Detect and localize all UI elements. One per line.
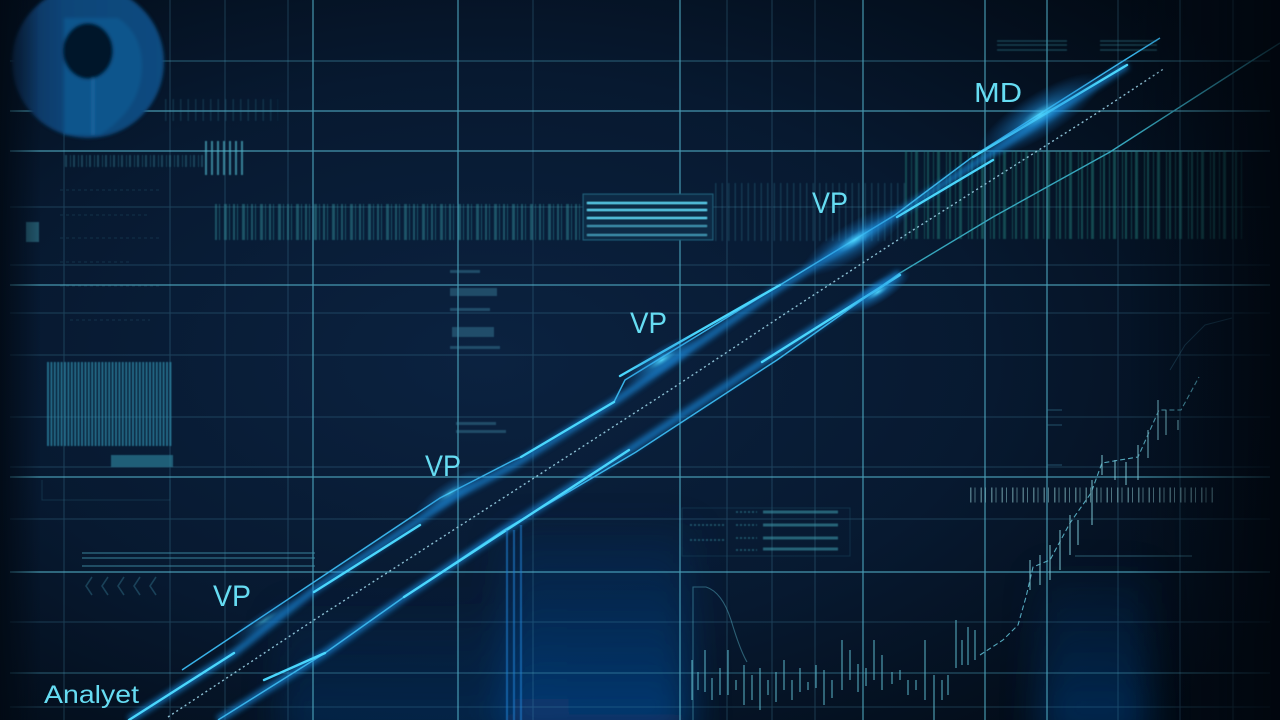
panel: left faded data table — [42, 190, 170, 500]
right vignette — [1130, 0, 1280, 720]
column beam — [507, 525, 521, 720]
label: VP 2: VP — [425, 450, 461, 483]
chart: right faint trace — [1047, 318, 1232, 465]
panel: lower-center bars — [682, 508, 850, 556]
glowing floor panels — [280, 530, 1150, 720]
label: Analyst: Analyet — [44, 681, 139, 709]
beam glow — [129, 65, 1127, 720]
panel: center-left text stubs — [450, 270, 506, 433]
label: VP 1: VP — [213, 580, 251, 613]
chart: top-left small bars — [65, 110, 278, 161]
chart: bottom-left chevrons and bars — [82, 553, 315, 595]
panel: top-right faint bars — [997, 41, 1157, 50]
beam thin lines — [182, 38, 1160, 720]
chart: wide barcode strip — [215, 195, 1243, 222]
glow nodes — [224, 58, 1113, 651]
edge vignette — [0, 0, 40, 720]
beam distant line — [900, 43, 1280, 273]
panel: central line list — [583, 194, 713, 240]
label: MD: MD — [974, 77, 1022, 108]
chart: left teal bar block — [26, 222, 173, 467]
dotted centre line — [168, 68, 1165, 717]
icon: circular emblem — [12, 0, 164, 138]
label: VP 4: VP — [812, 187, 848, 220]
label: VP 3: VP — [630, 307, 667, 340]
chart: bottom line chart — [692, 377, 1216, 720]
bright segments — [129, 65, 1127, 720]
